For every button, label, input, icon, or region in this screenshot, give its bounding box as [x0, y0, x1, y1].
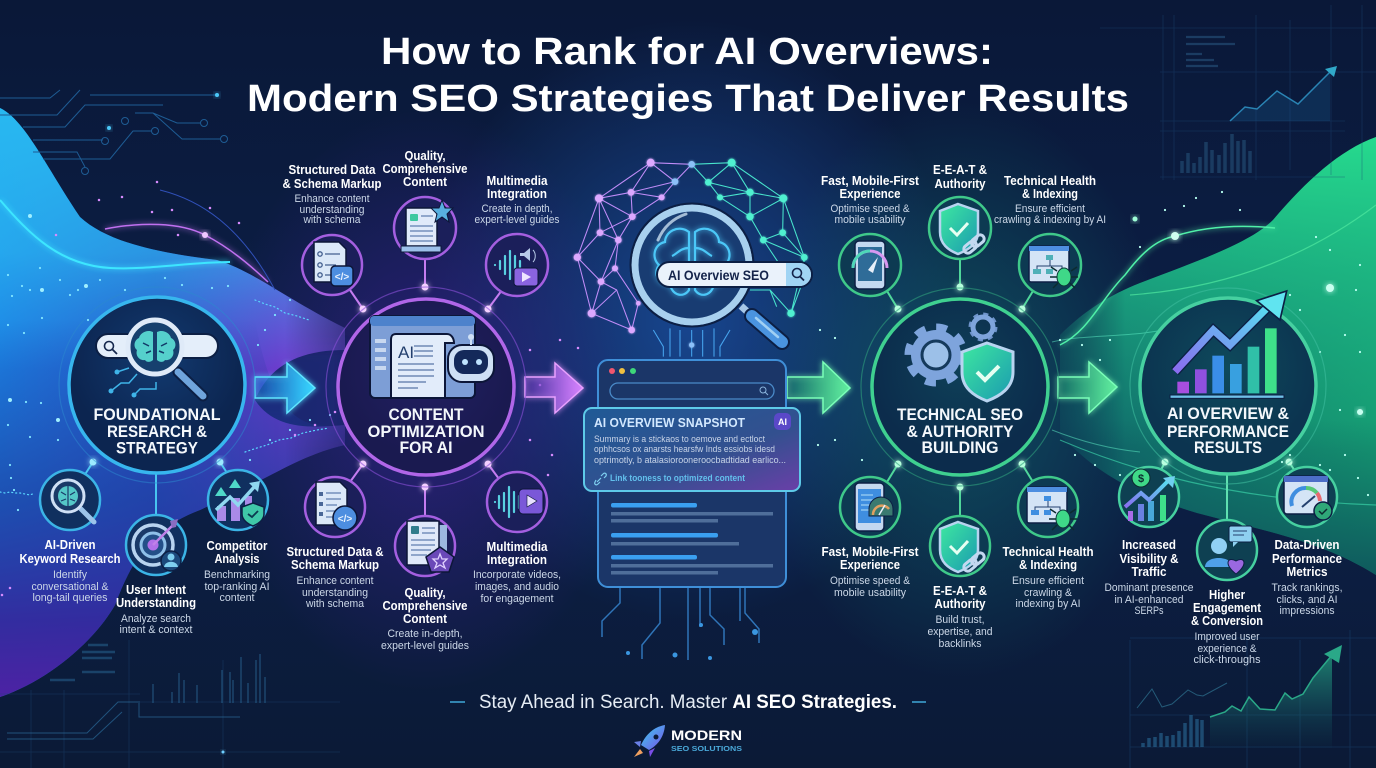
description: mobile usability [834, 587, 906, 599]
description: Optimise speed & [830, 203, 910, 215]
description: Create in-depth, [388, 628, 462, 640]
title: Modern SEO Strategies That Deliver Results [247, 78, 1129, 120]
logo: Modern SEO Solutions [634, 725, 742, 757]
heading: Integration [487, 552, 547, 567]
icon: dashboard gauge with check [1277, 467, 1337, 527]
chart decoration: bottom left [0, 640, 340, 768]
heading [1272, 537, 1342, 579]
heading [382, 148, 468, 189]
item: technical health top [994, 173, 1106, 296]
description: top-ranking AI [204, 581, 270, 593]
browser window [598, 360, 786, 660]
heading: AI-Driven [44, 537, 96, 552]
hub title: FOR AI [400, 439, 452, 457]
hub title [94, 406, 220, 458]
heading: Multimedia [486, 539, 548, 554]
item: E-E-A-T bottom [928, 516, 992, 650]
icon: shield and chain [930, 516, 990, 576]
item: multimedia bottom [473, 472, 561, 605]
description [1104, 582, 1194, 617]
heading: Data-Driven [1274, 537, 1340, 552]
hub circle: foundational [59, 287, 255, 483]
item: fast mobile-first bottom [822, 477, 919, 599]
heading: Structured Data & [286, 544, 384, 559]
item: structured data top [282, 162, 382, 295]
item: technical health bottom [1002, 477, 1094, 610]
heading [382, 585, 468, 626]
hub title: AI OVERVIEW & [1167, 405, 1289, 423]
item: quality content bottom [381, 516, 469, 652]
heading: Competitor [206, 538, 268, 553]
heading [821, 173, 920, 201]
panel: technical SEO & authority building [821, 162, 1106, 650]
description: crawling & [1024, 587, 1073, 599]
description: content [220, 592, 254, 604]
heading [286, 544, 384, 572]
panel: center AI overview graphic [574, 159, 812, 660]
icon: gears and shield [909, 315, 1013, 401]
heading [116, 582, 196, 610]
heading [486, 173, 548, 201]
neural network [574, 159, 808, 357]
panel: foundational research & strategy [20, 287, 270, 636]
icon: sitemap and bug [1018, 477, 1078, 537]
description: with schema [305, 598, 365, 610]
heading: Quality, [404, 148, 446, 163]
AI overview snapshot card: Link tooness to optimized content [610, 473, 746, 484]
icon: waveform speaker and play [486, 234, 548, 296]
hub title: BUILDING [922, 439, 998, 457]
heading: Understanding [116, 595, 196, 610]
icon: waveform and play button [487, 472, 547, 532]
heading [933, 162, 987, 191]
arrow: technical to results [1058, 362, 1117, 413]
item: fast mobile-first top [821, 173, 920, 296]
right wave [1052, 137, 1376, 575]
icon: document with star [394, 197, 456, 259]
heading: User Intent [126, 582, 187, 597]
description [294, 193, 370, 226]
heading: Technical Health [1004, 173, 1096, 188]
heading [822, 544, 919, 572]
hub title [1167, 405, 1289, 457]
description: expert-level guides [474, 214, 560, 226]
hub title: OPTIMIZATION [368, 423, 484, 441]
AI overview snapshot card: Summary is a stickaos to oemove and ectloct [594, 434, 766, 444]
heading: Schema Markup [291, 557, 379, 572]
description: understanding [302, 587, 368, 599]
heading: Comprehensive [382, 598, 468, 613]
heading: Performance [1272, 551, 1342, 566]
icon: rising bar chart and arrow [1170, 291, 1287, 398]
AI overview snapshot card: optrimotly, b atalasiorooneroocbadtidad earlico... [594, 455, 786, 465]
heading [1120, 537, 1178, 579]
heading [1191, 587, 1263, 628]
chart decoration: bottom right [1130, 630, 1376, 768]
heading [206, 538, 268, 566]
hub title: FOUNDATIONAL [94, 406, 220, 424]
description: SERPs [1134, 605, 1164, 617]
heading [282, 162, 382, 191]
heading: Experience [840, 557, 900, 572]
description: Enhance content [296, 575, 374, 587]
heading: & Indexing [1019, 557, 1077, 572]
arrow: content to snapshot [525, 363, 583, 413]
magnifier with brain [630, 204, 782, 342]
description: Analyze search [121, 613, 191, 625]
hub title: CONTENT [388, 406, 464, 424]
hub title [368, 406, 484, 457]
search bar: AI Overview SEO [668, 268, 769, 283]
description: click-throughs [1194, 654, 1261, 666]
item: increased visibility [1104, 467, 1194, 617]
heading: Increased [1122, 537, 1176, 552]
description: Ensure efficient [1015, 203, 1085, 215]
description: Improved user [1194, 631, 1260, 643]
heading: & Conversion [1191, 613, 1263, 628]
heading [20, 537, 121, 566]
icon: stacked documents with badge [395, 516, 455, 576]
hub title: STRATEGY [116, 440, 198, 458]
icon: brain magnifier [40, 470, 100, 530]
heading: Experience [840, 186, 900, 201]
hub circle: technical SEO [861, 288, 1059, 486]
description [1194, 631, 1261, 666]
heading: Structured Data [288, 162, 376, 177]
description: conversational & [32, 581, 109, 593]
item: multimedia top [474, 173, 560, 296]
heading: Authority [934, 596, 986, 611]
item: structured data bottom [286, 477, 384, 610]
hub title: & AUTHORITY [906, 423, 1014, 441]
description [120, 613, 192, 636]
description: with schema [303, 214, 361, 226]
heading: Keyword Research [20, 551, 121, 566]
logo: Modern SEO Solutions: MODERN [671, 727, 742, 743]
logo: Modern SEO Solutions: SEO SOLUTIONS [671, 744, 742, 753]
footer tagline: Stay Ahead in Search. Master AI SEO Strategies. [479, 692, 897, 713]
description [830, 575, 911, 599]
description: in AI-enhanced [1114, 594, 1184, 606]
search bar [657, 262, 812, 287]
description: backlinks [938, 638, 982, 650]
description: Optimise speed & [830, 575, 911, 587]
hub title [897, 406, 1023, 457]
description [32, 569, 109, 604]
AI overview snapshot card: ophhcsos ox anarsts hearsfw Inds essiobs idesd [594, 444, 775, 454]
left wave [0, 108, 345, 697]
description [928, 614, 992, 650]
icon: sitemap window with bug [1019, 234, 1081, 296]
icon: browser window with AI document and robot [370, 316, 494, 398]
hub title: RESULTS [1194, 439, 1262, 457]
heading: Traffic [1132, 564, 1166, 579]
description: expert-level guides [381, 640, 469, 652]
arrow: snapshot to technical [787, 362, 850, 413]
heading: Engagement [1193, 600, 1262, 615]
description: crawling & indexing by AI [994, 214, 1106, 226]
heading: & Schema Markup [282, 176, 382, 191]
panel: AI overview & performance results [1104, 288, 1342, 666]
hub circle: results [1130, 288, 1326, 484]
icon: target with person [126, 515, 186, 575]
description [473, 569, 561, 605]
panel: content optimization for AI [282, 148, 561, 652]
description: indexing by AI [1016, 598, 1080, 610]
item: competitor analysis [204, 470, 270, 604]
icon: phone with gauge badge [840, 477, 900, 537]
description: Create in depth, [482, 203, 552, 215]
description: images, and audio [475, 581, 559, 593]
description: mobile usability [834, 214, 906, 226]
circuit decoration: top left [0, 90, 228, 174]
title: How to Rank for AI Overviews: [381, 31, 993, 73]
heading: Technical Health [1002, 544, 1094, 559]
heading [933, 583, 987, 611]
description: long-tail queries [32, 592, 108, 604]
item: data-driven metrics [1272, 467, 1342, 617]
description: expertise, and [928, 626, 992, 638]
description: intent & context [120, 624, 192, 636]
item: user intent understanding [116, 515, 196, 636]
heading: Quality, [404, 585, 446, 600]
description [994, 203, 1106, 226]
AI overview snapshot card: AI [778, 417, 787, 427]
chart decoration: top right [1100, 5, 1376, 180]
heading: Content [403, 174, 448, 189]
description: Track rankings, [1272, 582, 1342, 594]
heading: Visibility & [1120, 551, 1178, 566]
description: experience & [1198, 643, 1257, 655]
icon: person, chat bubble and heart [1197, 520, 1257, 580]
description: Ensure efficient [1012, 575, 1084, 587]
icon: phone with gauge [839, 234, 901, 296]
description: Build trust, [936, 614, 984, 626]
heading: Content [403, 611, 448, 626]
description: Benchmarking [204, 569, 270, 581]
icon: document with code: </> [335, 272, 349, 283]
heading: Metrics [1286, 564, 1328, 579]
description [830, 203, 910, 226]
hub title: PERFORMANCE [1167, 423, 1289, 441]
heading [1004, 173, 1096, 201]
heading: Comprehensive [382, 161, 468, 176]
icon: shield with chain [929, 197, 991, 259]
heading: Analysis [214, 551, 260, 566]
hub title: RESEARCH & [107, 423, 207, 441]
heading: E-E-A-T & [933, 162, 987, 177]
item: higher engagement [1191, 520, 1263, 666]
item: quality content top [382, 148, 468, 259]
item: AI-driven keyword research [20, 470, 121, 604]
icon: growth chart with coin: $ [1138, 473, 1144, 485]
description: Identify [53, 569, 87, 581]
description: for engagement [480, 593, 554, 605]
icon: rocket [634, 725, 665, 757]
description: understanding [300, 204, 364, 216]
description [474, 203, 560, 226]
heading [486, 539, 548, 567]
hub title: TECHNICAL SEO [897, 406, 1023, 424]
description: Incorporate videos, [473, 569, 561, 581]
description: Enhance content [294, 193, 370, 205]
icon: document with code badge: </> [338, 514, 352, 525]
icon: search bar with brain magnifier [96, 320, 218, 398]
search result lines [611, 503, 773, 574]
heading [1002, 544, 1094, 572]
icon: browser window with AI document and robot: AI [398, 343, 414, 362]
description [1012, 575, 1084, 610]
heading: & Indexing [1022, 186, 1078, 201]
heading: Authority [934, 176, 986, 191]
title [247, 31, 1129, 120]
heading: Multimedia [486, 173, 548, 188]
icon: chart with shield [208, 470, 268, 530]
description: impressions [1280, 605, 1335, 617]
description [1272, 582, 1342, 617]
heading: Fast, Mobile-First [822, 544, 919, 559]
AI overview snapshot card [584, 408, 800, 491]
item: E-E-A-T top [929, 162, 991, 259]
AI overview snapshot card: AI OVERVIEW SNAPSHOT [594, 415, 745, 430]
heading: Fast, Mobile-First [821, 173, 920, 188]
hub circle: content optimization [326, 287, 526, 487]
arrow: research to content [255, 363, 315, 413]
description: clicks, and AI [1276, 594, 1338, 606]
heading: E-E-A-T & [933, 583, 987, 598]
description: Dominant presence [1104, 582, 1194, 594]
description [381, 628, 469, 652]
icon: growth chart with coin [1119, 467, 1179, 527]
description [204, 569, 270, 604]
heading: Higher [1209, 587, 1245, 602]
heading: Integration [487, 186, 547, 201]
description [296, 575, 374, 610]
